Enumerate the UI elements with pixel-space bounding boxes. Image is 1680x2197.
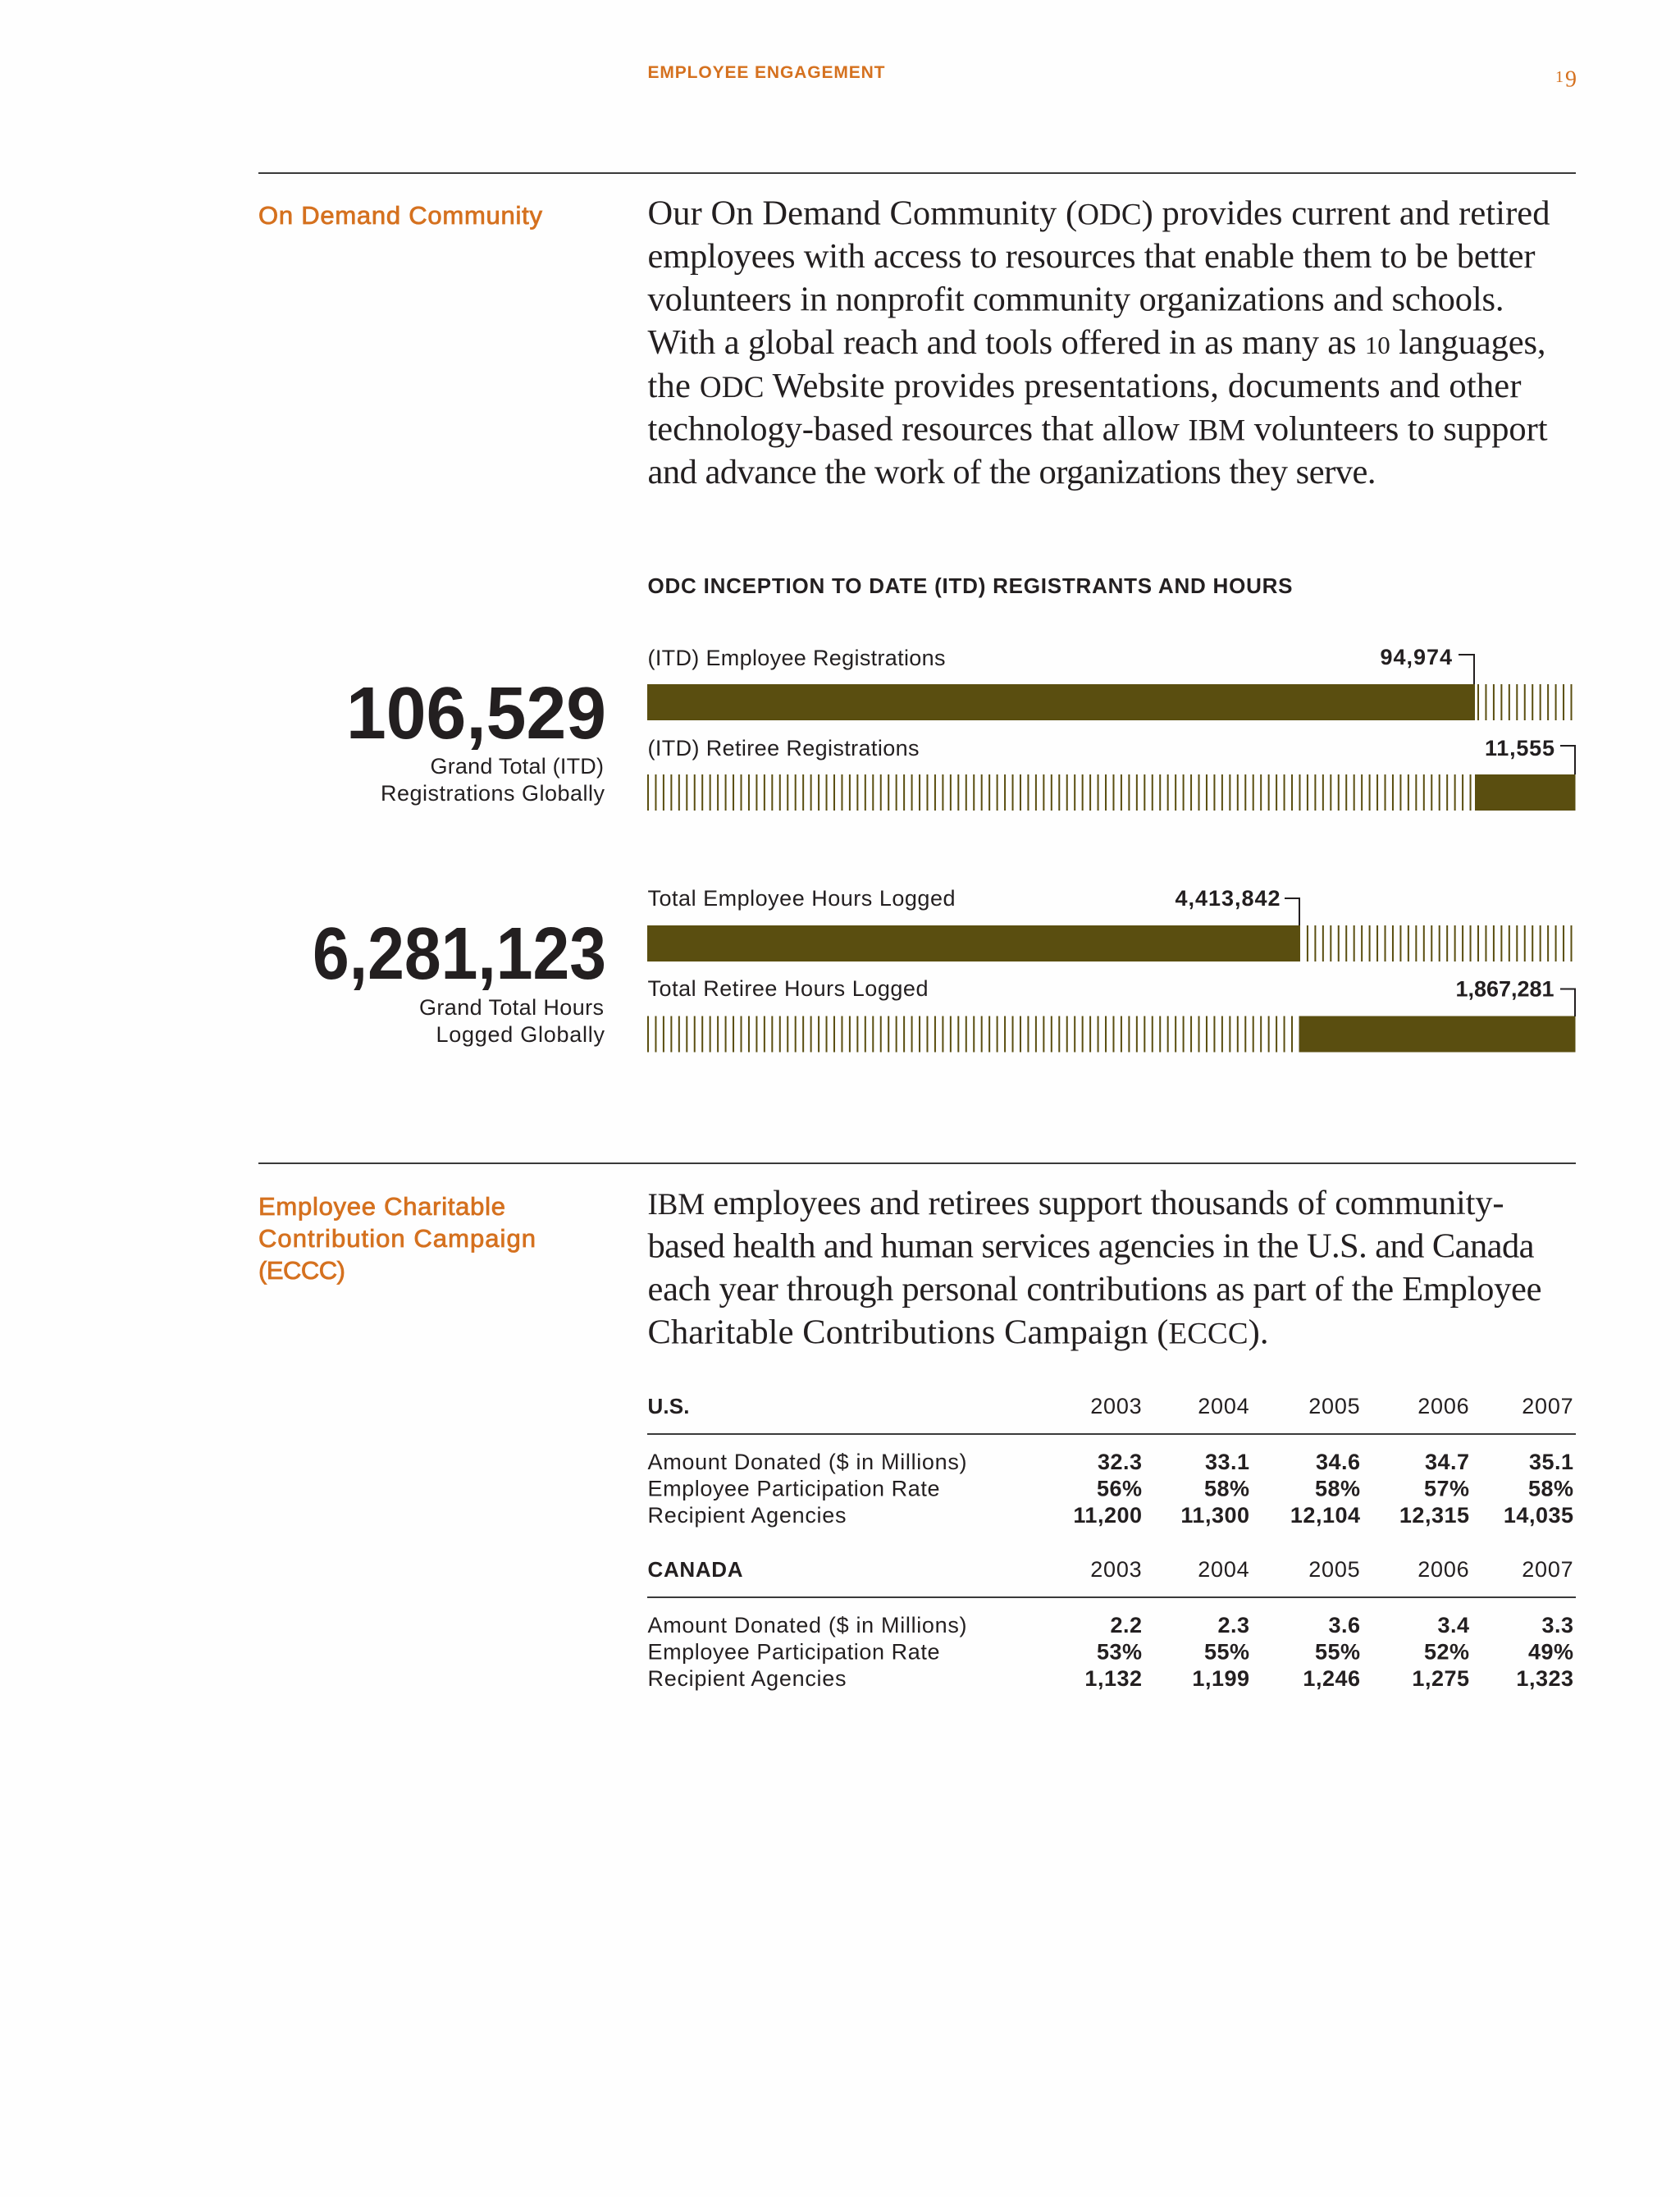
intro paragraph: On Demand Community [648, 194, 1550, 491]
bar: employee hours [647, 886, 1574, 961]
intro paragraph: ECCC: each year through personal contributions as part of the Employee [648, 1270, 1542, 1309]
heading: Employee Charitable Contribution Campaign: Employee Charitable [258, 1192, 505, 1221]
stat: grand total hours [313, 913, 606, 1047]
table: U.S. [647, 1394, 1576, 1528]
bar: employee registrations [647, 645, 1574, 720]
table: Canada: 2004 [1198, 1557, 1250, 1582]
bar: employee registrations: (ITD) Employee Registrations [648, 646, 945, 670]
page number: 1 [1555, 68, 1564, 86]
table: Canada: 2.2 [1110, 1613, 1142, 1637]
bar: retiree hours [647, 976, 1575, 1052]
table: Canada: 2.3 [1217, 1613, 1250, 1637]
table: U.S.: 34.7 [1425, 1450, 1470, 1474]
stat: grand total registrations: 106,529 [346, 673, 606, 755]
stat: grand total registrations: Grand Total (ITD) [430, 754, 604, 779]
stat: grand total hours: Logged Globally [436, 1022, 605, 1047]
table: U.S.: 2006 [1418, 1394, 1470, 1418]
table: Canada: 2005 [1308, 1557, 1360, 1582]
table: U.S.: 32.3 [1098, 1450, 1142, 1474]
bar: employee hours: 4,413,842 [1175, 886, 1281, 911]
table: U.S.: Employee Participation Rate [648, 1477, 940, 1501]
heading: Employee Charitable Contribution Campaign: (ECCC) [258, 1256, 345, 1285]
table: Canada: 1,199 [1192, 1666, 1250, 1691]
table: Canada: 1,132 [1084, 1666, 1142, 1691]
table: Canada: 1,275 [1412, 1666, 1470, 1691]
table: Canada: 49% [1528, 1639, 1573, 1664]
table: U.S.: 12,315 [1399, 1503, 1470, 1528]
intro paragraph: On Demand Community: the ODC Website provides presentations, documents and other [648, 367, 1521, 405]
heading: Employee Charitable Contribution Campaign: Contribution Campaign [258, 1224, 536, 1253]
bar: retiree registrations: 11,555 [1485, 736, 1555, 760]
table: U.S.: 35.1 [1529, 1450, 1573, 1474]
bar: retiree registrations [647, 736, 1575, 811]
heading: Employee Charitable Contribution Campaign [258, 1192, 536, 1285]
intro paragraph: On Demand Community: and advance the work of the organizations they serve. [648, 453, 1376, 491]
table: U.S.: 12,104 [1290, 1503, 1360, 1528]
table: U.S.: 58% [1315, 1477, 1360, 1501]
table: Canada: 2006 [1418, 1557, 1470, 1582]
table: Canada [647, 1557, 1576, 1691]
intro paragraph: On Demand Community: employees with access to resources that enable them to be better [648, 237, 1536, 276]
table: Canada: CANADA [648, 1557, 743, 1582]
bar: employee registrations: 94,974 [1380, 645, 1452, 669]
bar: employee hours: Total Employee Hours Logged [648, 886, 955, 911]
table: U.S.: 14,035 [1504, 1503, 1573, 1528]
stat: grand total registrations: Registrations Globally [381, 781, 605, 806]
table: Canada: 52% [1424, 1639, 1470, 1664]
table: Canada: 1,323 [1516, 1666, 1573, 1691]
table: Canada: Recipient Agencies [648, 1666, 847, 1691]
section header: EMPLOYEE ENGAGEMENT [648, 63, 885, 82]
table: Canada: 53% [1097, 1639, 1142, 1664]
bar: retiree hours: Total Retiree Hours Logged [648, 976, 929, 1001]
table: Canada: Employee Participation Rate [648, 1639, 940, 1664]
table: Canada: 3.4 [1437, 1613, 1470, 1637]
bar: retiree hours: 1,867,281 [1455, 976, 1554, 1001]
chart heading: ODC INCEPTION TO DATE (ITD) REGISTRANTS AND HOURS [648, 573, 1293, 598]
table: U.S.: 2003 [1090, 1394, 1142, 1418]
table: U.S.: 34.6 [1316, 1450, 1360, 1474]
table: Canada: 2003 [1090, 1557, 1142, 1582]
table: Canada: 55% [1204, 1639, 1250, 1664]
table: U.S.: Recipient Agencies [648, 1503, 847, 1528]
table: U.S.: 2007 [1522, 1394, 1573, 1418]
table: U.S.: U.S. [648, 1394, 689, 1418]
table: Canada: Amount Donated ($ in Millions) [648, 1613, 966, 1637]
table: U.S.: Amount Donated ($ in Millions) [648, 1450, 966, 1474]
table: Canada: 55% [1315, 1639, 1360, 1664]
intro paragraph: On Demand Community: Our On Demand Community (ODC) provides current and retired [648, 194, 1550, 233]
table: Canada: 1,246 [1303, 1666, 1360, 1691]
intro paragraph: ECCC: Charitable Contributions Campaign (ECCC). [648, 1313, 1268, 1352]
intro paragraph: On Demand Community: volunteers in nonprofit community organizations and schools. [648, 281, 1504, 319]
stat: grand total hours: 6,281,123 [313, 913, 606, 995]
table: U.S.: 11,300 [1180, 1503, 1250, 1528]
intro paragraph: ECCC: based health and human services agencies in the U.S. and Canada [648, 1227, 1535, 1265]
table: U.S.: 2004 [1198, 1394, 1250, 1418]
table: Canada: 3.3 [1541, 1613, 1573, 1637]
stat: grand total hours: Grand Total Hours [419, 995, 604, 1020]
intro paragraph: ECCC: IBM employees and retirees support thousands of community- [648, 1184, 1504, 1222]
table: U.S.: 58% [1204, 1477, 1250, 1501]
table: Canada: 3.6 [1328, 1613, 1360, 1637]
intro paragraph: On Demand Community: With a global reach and tools offered in as many as 10 languages, [648, 323, 1545, 362]
table: U.S.: 2005 [1308, 1394, 1360, 1418]
stat: grand total registrations [346, 673, 606, 806]
heading: On Demand Community: On Demand Community [258, 201, 543, 230]
intro paragraph: ECCC [648, 1184, 1542, 1352]
table: Canada: 2007 [1522, 1557, 1573, 1582]
page number: 9 [1565, 67, 1577, 92]
table: U.S.: 58% [1528, 1477, 1573, 1501]
intro paragraph: On Demand Community: technology-based resources that allow IBM volunteers to support [648, 409, 1548, 448]
bar: retiree registrations: (ITD) Retiree Registrations [648, 736, 919, 760]
table: U.S.: 57% [1424, 1477, 1470, 1501]
table: U.S.: 56% [1097, 1477, 1142, 1501]
table: U.S.: 33.1 [1205, 1450, 1250, 1474]
table: U.S.: 11,200 [1073, 1503, 1142, 1528]
